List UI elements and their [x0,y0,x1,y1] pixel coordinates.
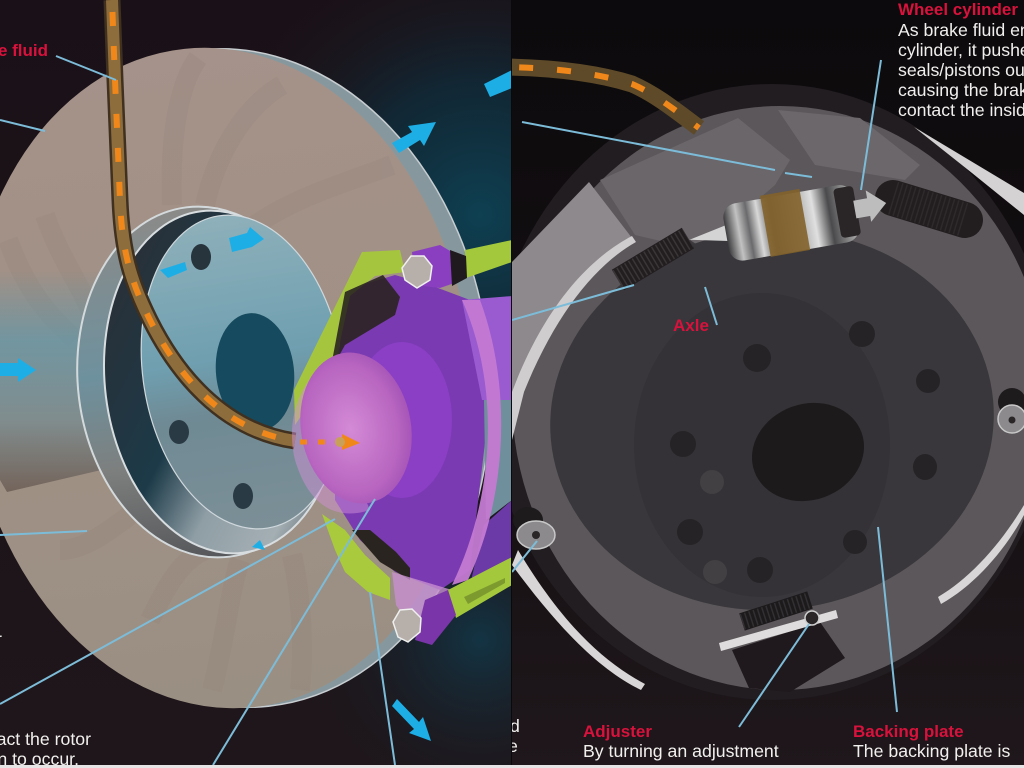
wheel cylinder [690,185,886,261]
brake rotor [0,48,486,708]
panel divider [511,0,512,768]
axle [0,281,99,492]
panel: disc brake [0,0,523,768]
leader lines: disc brake [0,56,395,765]
bottom edge strip [0,765,1024,768]
brake fluid pipe: drum [505,67,699,128]
brake caliper [289,240,512,645]
panel: drum brake [490,0,1024,768]
return springs [618,198,965,622]
text block: wheel cylinder: Wheel cylinder [898,0,1018,19]
text block: adjuster: By turning an adjustment [583,741,779,761]
text block: adjuster: Adjuster [583,722,652,741]
brake drum and backing plate [490,84,1024,700]
leader lines: drum brake [512,60,897,727]
brake fluid pipe [112,0,295,441]
adjuster rod [719,610,838,651]
text block: backing plate [853,722,1010,761]
text fragment: clipped letters: e [508,736,518,756]
text fragment: clipped letters: d [510,716,520,736]
text fragment: clipped letters [512,719,519,752]
text block: backing plate: The backing plate is [853,741,1010,761]
icon: air flow arrows [0,70,512,741]
text block: adjuster [583,722,779,761]
hub [76,206,340,558]
fasteners [513,388,1024,549]
text block: wheel cylinder [898,0,1024,120]
label: axle: Axle [673,316,709,335]
text block: backing plate: Backing plate [853,722,964,741]
